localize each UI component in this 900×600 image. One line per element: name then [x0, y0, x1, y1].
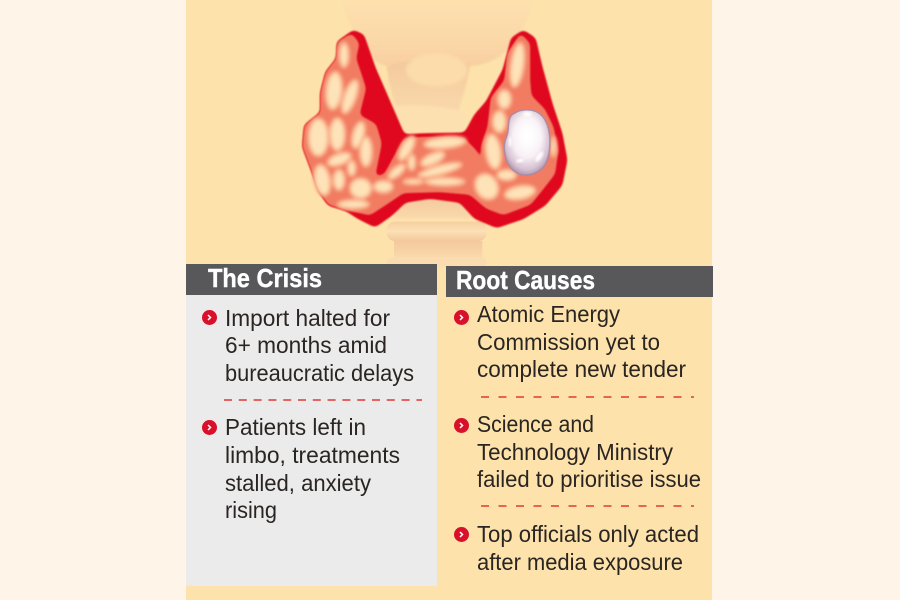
bullet: top officials — [454, 521, 699, 575]
heading: Root Causes: Root Causes — [456, 265, 595, 295]
panel: The Crisis — [186, 263, 437, 586]
background panel — [186, 0, 712, 600]
neck and trachea — [340, 0, 533, 267]
bullet: atomic energy commission: Commission yet to — [477, 329, 660, 355]
bullet: science and technology ministry: failed to prioritise issue — [477, 466, 701, 492]
illustration: thyroid gland with nodule — [303, 0, 567, 267]
bullet: top officials: Top officials only acted — [477, 521, 699, 547]
bullet: atomic energy commission: complete new tender — [477, 356, 686, 382]
bullet: atomic energy commission: Atomic Energy — [477, 301, 620, 327]
bullet: science and technology ministry — [454, 411, 701, 492]
bullet: patients in limbo: Patients left in — [225, 414, 366, 440]
nodule — [504, 110, 550, 175]
heading: The Crisis: The Crisis — [208, 263, 322, 293]
bullet: patients in limbo: stalled, anxiety — [225, 470, 371, 496]
bullet: import halted: Import halted for — [225, 305, 390, 331]
bullet: top officials: after media exposure — [477, 549, 683, 575]
heading: The Crisis — [186, 263, 437, 295]
bullet: science and technology ministry: Technology Ministry — [477, 439, 673, 465]
panel: Root Causes — [446, 265, 713, 575]
bullet: import halted — [202, 305, 414, 386]
lobule highlights — [308, 42, 556, 209]
bullet: atomic energy commission — [454, 301, 686, 382]
bullet: patients in limbo: limbo, treatments — [225, 442, 400, 468]
bullet: science and technology ministry: Science and — [477, 411, 594, 437]
heading: Root Causes — [446, 265, 713, 297]
bullet: import halted: 6+ months amid — [225, 332, 387, 358]
bullet: patients in limbo: rising — [225, 497, 277, 523]
bullet: import halted: bureaucratic delays — [225, 360, 414, 386]
gland body — [303, 31, 567, 227]
bullet: patients in limbo — [202, 414, 400, 523]
